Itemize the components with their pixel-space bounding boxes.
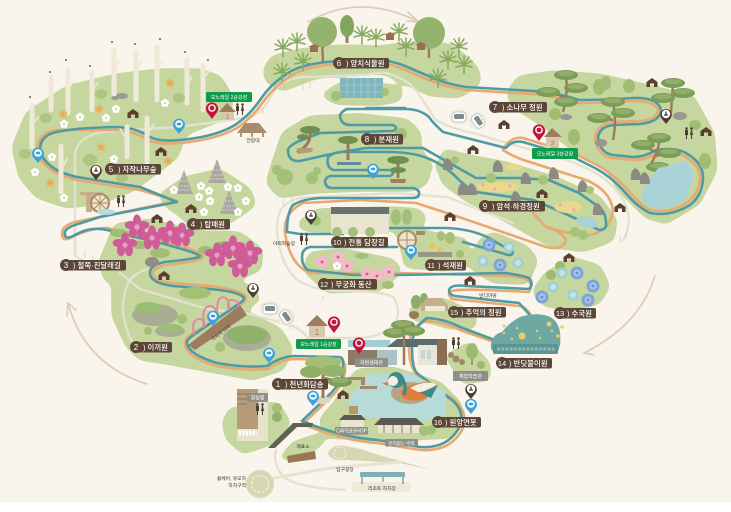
panel: stone garden with watermill	[398, 231, 464, 258]
gray facility tags	[247, 358, 488, 446]
monorail stations: 1	[315, 328, 320, 337]
label 11: ) 석재원	[438, 261, 463, 270]
small map text: 야외학습장	[273, 240, 296, 247]
label 16	[432, 416, 481, 428]
panel: traditional wall	[311, 207, 412, 237]
panel: memory garden	[409, 293, 448, 319]
label 8	[361, 133, 403, 145]
label 6: 6	[337, 59, 342, 68]
monorail stations: 3	[551, 140, 555, 147]
panel: bonsai garden	[272, 126, 409, 185]
label 5: ) 자작나무숲	[118, 165, 157, 174]
monorail tags	[206, 92, 578, 349]
label 2: ) 이끼원	[143, 343, 168, 352]
service pins	[90, 109, 672, 399]
label 12: 12	[320, 280, 328, 289]
restrooms	[117, 103, 693, 415]
label 5	[105, 163, 161, 175]
garden labels	[60, 57, 596, 428]
label 12: ) 무궁화 동산	[331, 280, 372, 289]
small map text	[210, 137, 497, 492]
label 6	[333, 57, 389, 69]
label 13: 13	[556, 309, 564, 318]
walking routes: orange	[37, 63, 700, 450]
direction arrow: top	[308, 7, 419, 22]
monorail tags: 모노레일 1승강장	[300, 341, 337, 348]
gray tag text: 체험학습관	[459, 373, 482, 380]
fence ticks	[85, 81, 626, 330]
direction arrow: right	[584, 276, 655, 355]
label 3: 3	[64, 261, 69, 270]
heart bridge	[188, 297, 247, 350]
label 16: ) 원앙연못	[445, 418, 477, 427]
direction arrow: left	[67, 303, 147, 384]
shrubs	[19, 89, 185, 182]
label 9: ) 암석·하경정원	[492, 202, 540, 211]
gray tag text: 전지없는 주택	[388, 440, 415, 447]
label 7	[489, 101, 547, 113]
label 10	[331, 236, 388, 248]
small map text: 리조트 하차장	[368, 485, 396, 492]
houses	[128, 78, 712, 399]
panel: birch forest planting	[19, 38, 209, 202]
label 1: ) 천년화담송	[285, 380, 324, 389]
label 7: ) 소나무 정원	[502, 103, 543, 112]
label 9	[479, 200, 545, 212]
birch trees	[32, 47, 209, 192]
resort parking	[352, 472, 410, 492]
label 16: 16	[434, 418, 442, 427]
small map text: 매표소	[296, 443, 310, 450]
label 6: ) 양치식물원	[346, 59, 385, 68]
label 14: ) 반딧불이원	[509, 359, 548, 368]
panel: firefly dome	[491, 314, 564, 354]
label 3: ) 철쭉·진달래길	[73, 261, 121, 270]
label 7: 7	[493, 103, 498, 112]
monorail tags: 모노레일 2승강장	[211, 94, 248, 101]
panel: pine garden	[536, 70, 711, 208]
label 2	[130, 341, 172, 353]
small map text: 입구광장	[336, 466, 354, 473]
experience centre props	[448, 343, 485, 369]
thousand year pine	[300, 356, 352, 404]
pavilion	[237, 123, 267, 137]
panel: hydrangea garden	[536, 261, 600, 306]
rocks	[111, 93, 128, 100]
flowers	[59, 110, 67, 118]
label 4: 4	[191, 220, 196, 229]
label 14: 14	[498, 359, 506, 368]
label 10: ) 전통 담장길	[344, 238, 385, 247]
monorail stations	[219, 103, 562, 337]
parking building	[237, 389, 282, 441]
small map text: 전망대	[246, 137, 260, 144]
monorail cars	[260, 109, 487, 326]
label 1	[272, 378, 328, 390]
blue pins	[32, 119, 477, 414]
label 4	[187, 218, 230, 230]
duck	[382, 372, 438, 404]
label 5: 5	[109, 165, 114, 174]
label 13	[554, 307, 596, 319]
panel: azaleas	[110, 214, 262, 277]
watermill near birch forest	[80, 192, 115, 215]
small map text: 반디마당	[479, 292, 497, 299]
entrance plaza	[328, 446, 432, 470]
label 8: ) 분재원	[374, 135, 399, 144]
gray tag text	[251, 360, 482, 447]
garden land shapes	[13, 42, 716, 459]
label 11	[425, 259, 466, 271]
drop-off circle	[246, 470, 274, 498]
label 15: ) 추억의 정원	[461, 308, 502, 317]
small map text: 하차구역	[228, 482, 246, 489]
label 14	[496, 357, 552, 369]
panel: rock garden	[443, 156, 603, 240]
walking routes: teal	[40, 60, 703, 447]
label 3	[60, 259, 126, 271]
label 9: 9	[483, 202, 488, 211]
monorail stations: 2	[226, 114, 230, 121]
label 15: 15	[450, 308, 458, 317]
cafe building	[339, 406, 366, 427]
birch bark flecks	[29, 38, 209, 98]
label 12	[318, 278, 377, 290]
label 2: 2	[134, 343, 139, 352]
pine: nature center	[383, 320, 425, 365]
red pins	[206, 102, 545, 354]
label 4: ) 탑매원	[200, 220, 225, 229]
greenhouse	[331, 78, 389, 101]
entrance gate	[268, 423, 313, 448]
panel: mandarin duck pond	[352, 372, 443, 418]
gray tag text: 자연생태관	[360, 360, 383, 366]
label 8: 8	[365, 135, 370, 144]
roads	[75, 73, 629, 490]
panel: mugunghwa hill	[315, 250, 396, 289]
ticket office	[287, 451, 316, 463]
label 1: 1	[276, 380, 281, 389]
panel: moss garden	[132, 287, 271, 352]
nature center	[348, 339, 447, 365]
label 13: ) 수국원	[567, 309, 592, 318]
traditional house	[374, 418, 436, 436]
gray tag text: 힐링별	[251, 394, 265, 402]
label 10: 10	[333, 238, 341, 247]
label 11: 11	[427, 261, 435, 270]
small map text: 휠체어, 유모차	[217, 475, 247, 482]
pier	[347, 377, 377, 389]
panel: palm / fern garden	[274, 15, 472, 87]
gray tag text: CAFE&SHOP	[336, 428, 368, 434]
panel: stone towers	[170, 159, 250, 216]
panel: hydrangea small	[477, 238, 524, 272]
monorail tags: 모노레일 3승강장	[537, 150, 574, 158]
label 15	[448, 306, 506, 318]
small map text: 약속의 다리	[210, 323, 232, 343]
